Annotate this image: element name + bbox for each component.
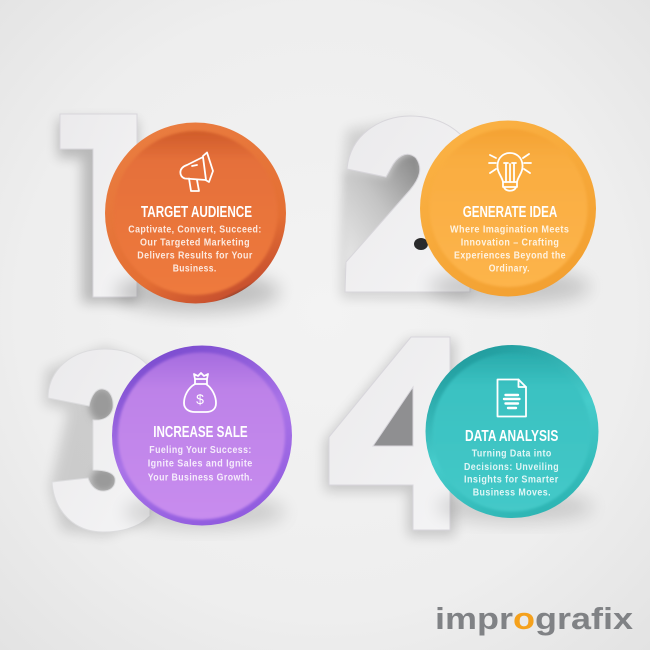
- panel: step 3 increase sale: [44, 346, 292, 536]
- title: target audience: TARGET AUDIENCE: [141, 204, 252, 221]
- disc shadow: [125, 496, 285, 528]
- description: data analysis: Decisions: Unveiling: [464, 461, 559, 473]
- description: increase sale: Fueling Your Success:: [149, 444, 252, 456]
- description: generate idea: Innovation – Crafting: [461, 237, 559, 249]
- panel: step 4 data analysis: [325, 337, 598, 536]
- logo: imprografix: impr ografix: [435, 601, 634, 636]
- disc 4 rim: [426, 345, 598, 518]
- description: increase sale: [148, 444, 253, 483]
- disc 1 rim: [105, 122, 286, 304]
- description: target audience: Business.: [173, 263, 217, 275]
- description: increase sale: Your Business Growth.: [148, 471, 253, 483]
- icon: document: [498, 380, 526, 416]
- description: data analysis: Insights for Smarter: [464, 474, 559, 486]
- disc 2 rim: [420, 120, 596, 296]
- numeral 2 shadow: [341, 120, 470, 298]
- panel: step 2 generate idea: [341, 116, 596, 305]
- disc 1 face: [114, 131, 278, 295]
- description: target audience: Delivers Results for Your: [137, 250, 253, 262]
- numeral 4 shadow: [325, 340, 455, 536]
- description: generate idea: Where Imagination Meets: [450, 224, 569, 236]
- description: target audience: Captivate, Convert, Succeed:: [128, 224, 262, 236]
- disc shadow: [430, 269, 590, 305]
- numeral 3: [48, 349, 150, 532]
- numeral 1: [60, 114, 137, 297]
- disc 3 face: [118, 352, 285, 520]
- icon: megaphone: [180, 152, 213, 191]
- numeral 2: [345, 116, 470, 292]
- title: data analysis: DATA ANALYSIS: [465, 428, 558, 445]
- disc 2 face: [430, 129, 588, 287]
- icon: money bag: [184, 373, 216, 412]
- dark notch: [414, 238, 428, 250]
- description: data analysis: [464, 448, 559, 499]
- disc shadow: [116, 272, 280, 312]
- numeral 1 shadow: [58, 120, 137, 303]
- disc 3 rim: [112, 346, 292, 526]
- numeral 4 counter: [372, 386, 414, 447]
- description: generate idea: Ordinary.: [489, 263, 530, 275]
- title: increase sale: INCREASE SALE: [153, 424, 248, 441]
- icon: light bulb: [489, 153, 531, 191]
- description: generate idea: Experiences Beyond the: [454, 250, 566, 262]
- numeral 3 shadow: [44, 347, 150, 536]
- disc 4 face: [432, 354, 590, 512]
- description: target audience: Our Targeted Marketing: [140, 237, 250, 249]
- numeral 4: [329, 337, 450, 530]
- title: generate idea: GENERATE IDEA: [463, 204, 557, 221]
- description: generate idea: [450, 224, 569, 275]
- icon: money bag: $: [196, 391, 204, 407]
- numeral 2 counter shadow: [345, 154, 424, 268]
- description: data analysis: Turning Data into: [472, 448, 552, 460]
- description: target audience: [128, 224, 262, 275]
- description: data analysis: Business Moves.: [473, 487, 551, 499]
- disc shadow: [437, 492, 593, 522]
- numeral 3 counter shadows: [89, 388, 117, 492]
- description: increase sale: Ignite Sales and Ignite: [148, 458, 253, 470]
- panel: step 1 target audience: [58, 114, 286, 312]
